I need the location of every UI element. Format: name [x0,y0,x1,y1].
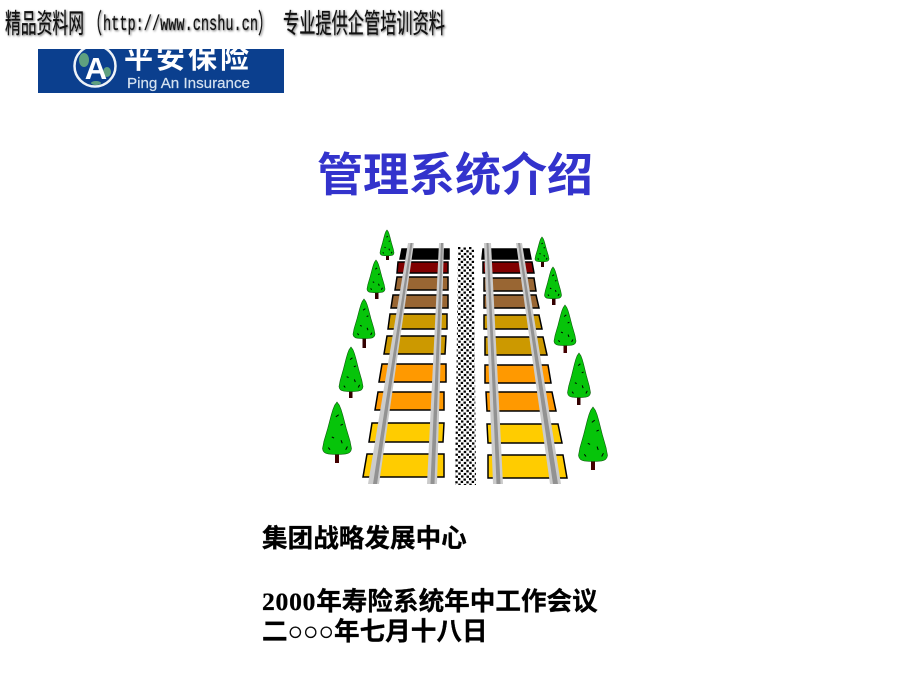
top banner text [5,2,447,41]
left ties [363,249,449,477]
railway illustration [322,230,608,485]
right trees [535,237,608,470]
right ties [482,249,567,478]
gravel track bed [455,247,476,485]
left trees [322,230,394,463]
title: 管理系统介绍 [317,149,593,201]
top banner text: 精品资料网 [5,2,84,41]
presenter and meeting text: 二○○○年七月十八日 [262,617,488,646]
presenter and meeting text: 集团战略发展中心 [262,524,467,553]
presenter and meeting text: 2000年寿险系统年中工作会议 [262,587,598,616]
top banner text: ） [258,2,272,41]
presenter and meeting text [262,524,598,646]
top banner text: （ [88,2,102,41]
logo: Ping An Insurance: A [85,51,107,86]
logo: Ping An Insurance [38,49,284,93]
right rails [484,243,561,484]
top banner text: http://www.cnshu.cn [103,14,258,37]
logo: Ping An Insurance: Ping An Insurance [127,75,250,92]
left rails [368,243,444,484]
